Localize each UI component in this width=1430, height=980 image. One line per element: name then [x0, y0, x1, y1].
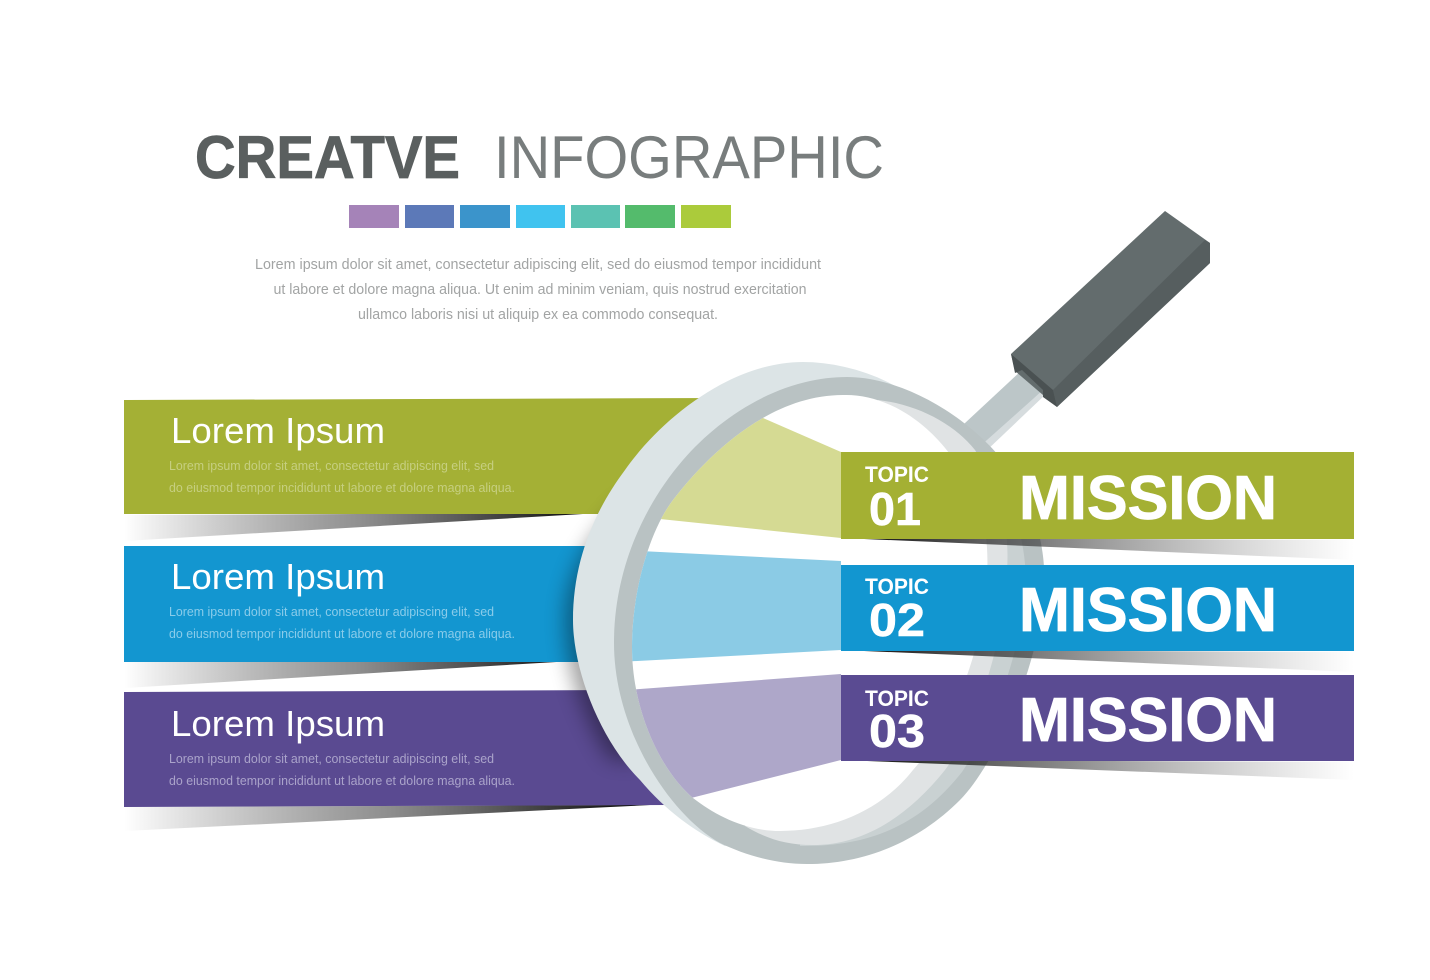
right bar 1: green mission: MISSION — [1019, 464, 1277, 533]
title: INFOGRAPHIC — [494, 124, 884, 191]
right bar 2: blue mission: MISSION — [1019, 576, 1277, 645]
left panel 2: blue — [124, 546, 600, 688]
magnifying glass — [565, 211, 1210, 864]
right bar 2: blue mission — [841, 565, 1354, 672]
soft shadow beside ring — [565, 500, 640, 760]
left panel 2: blue: Lorem ipsum dolor sit amet, consectetur adipiscing elit, sed — [169, 605, 494, 619]
intro paragraph: ut labore et dolore magna aliqua. Ut enim ad minim veniam, quis nostrud exercitation — [274, 282, 806, 298]
right bar 1: green mission: TOPIC — [865, 462, 929, 487]
handle shaft — [950, 370, 1046, 452]
intro paragraph: Lorem ipsum dolor sit amet, consectetur adipiscing elit, sed do eiusmod tempor incididunt — [255, 257, 821, 273]
dark handle grip — [1011, 211, 1210, 407]
right bar 3: purple mission: 03 — [869, 705, 925, 757]
intro paragraph: ullamco laboris nisi ut aliquip ex ea commodo consequat. — [358, 307, 718, 323]
title: CREATVE — [195, 124, 460, 191]
title — [195, 124, 884, 191]
left panel 3: purple: do eiusmod tempor incididunt ut labore et dolore magna aliqua. — [169, 774, 515, 788]
left panel 1: green: Lorem Ipsum — [171, 410, 385, 451]
right bar 3: purple mission: TOPIC — [865, 686, 929, 711]
left panel 2: blue: Lorem Ipsum — [171, 556, 385, 597]
left panel 2: blue: do eiusmod tempor incididunt ut labore et dolore magna aliqua. — [169, 627, 515, 641]
colour swatches — [349, 205, 731, 228]
left panel 3: purple — [124, 690, 670, 831]
left panel 1: green: do eiusmod tempor incididunt ut labore et dolore magna aliqua. — [169, 481, 515, 495]
right bar 1: green mission: 01 — [869, 483, 921, 535]
intro paragraph — [255, 257, 821, 323]
left panel 1: green: Lorem ipsum dolor sit amet, consectetur adipiscing elit, sed — [169, 459, 494, 473]
right bar 3: purple mission — [841, 675, 1354, 780]
lens tinted bands — [632, 418, 841, 798]
left panel 3: purple: Lorem Ipsum — [171, 703, 385, 744]
right bar 1: green mission — [841, 452, 1354, 560]
left panel 1: green — [124, 398, 720, 541]
right bar 3: purple mission: MISSION — [1019, 686, 1277, 755]
right bar 2: blue mission: 02 — [869, 594, 925, 646]
right bar 2: blue mission: TOPIC — [865, 574, 929, 599]
lens ring — [573, 362, 1044, 864]
infographic canvas — [124, 135, 1354, 864]
left panel 3: purple: Lorem ipsum dolor sit amet, consectetur adipiscing elit, sed — [169, 752, 494, 766]
